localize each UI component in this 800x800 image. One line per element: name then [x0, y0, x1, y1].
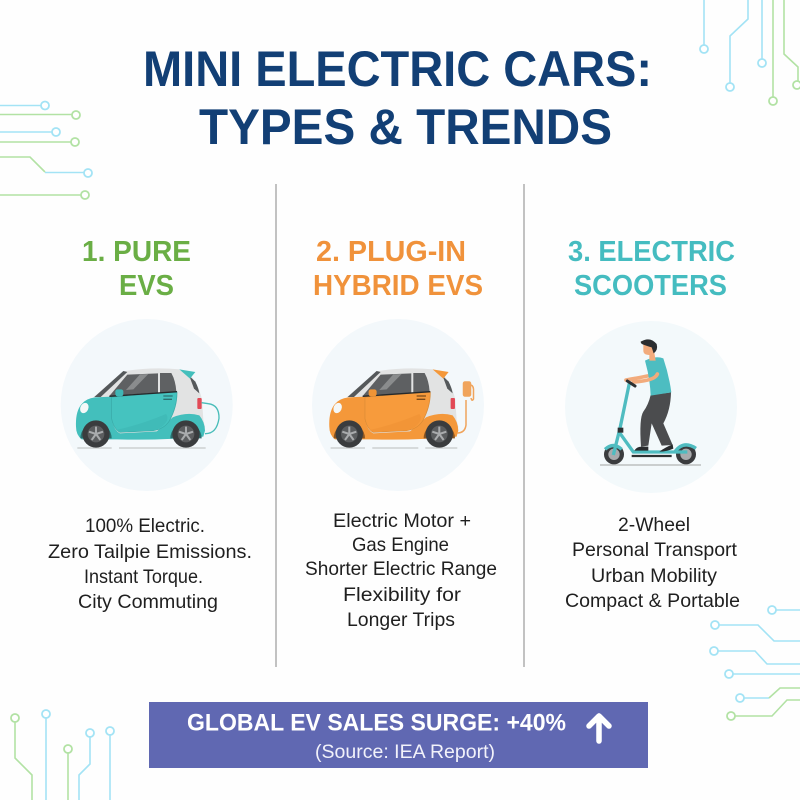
- icon: up arrow: [589, 716, 609, 741]
- text: scooter features: Personal Transport: [572, 539, 738, 561]
- heading: plug-in hybrid EVs: HYBRID EVS: [313, 270, 483, 302]
- circuit decoration: top left: [0, 102, 92, 199]
- text: scooter features: [565, 514, 740, 612]
- heading: electric scooters: SCOOTERS: [574, 270, 727, 302]
- icon: orange plug-in hybrid car: [312, 319, 484, 491]
- text: plug-in hybrid features: Gas Engine: [352, 534, 449, 556]
- title: MINI ELECTRIC CARS:: [143, 41, 652, 97]
- title: [143, 41, 652, 155]
- circuit decoration: bottom left: [11, 710, 114, 800]
- text: pure EV features: City Commuting: [78, 591, 218, 613]
- text: plug-in hybrid features: Shorter Electric Range: [305, 558, 497, 580]
- title: TYPES & TRENDS: [199, 99, 612, 155]
- banner headline: GLOBAL EV SALES SURGE: +40%: [187, 710, 566, 736]
- column dividers: [276, 184, 524, 667]
- heading: pure EVs: 1. PURE: [82, 236, 191, 268]
- banner source: (Source: IEA Report): [315, 742, 495, 763]
- heading: plug-in hybrid EVs: [313, 236, 483, 302]
- heading: plug-in hybrid EVs: 2. PLUG-IN: [316, 236, 466, 268]
- heading: electric scooters: 3. ELECTRIC: [568, 236, 735, 268]
- text: scooter features: 2-Wheel: [618, 514, 690, 536]
- text: scooter features: Urban Mobility: [591, 565, 717, 587]
- text: plug-in hybrid features: Flexibility for: [343, 584, 462, 606]
- text: plug-in hybrid features: Longer Trips: [347, 609, 455, 631]
- heading: electric scooters: [568, 236, 735, 302]
- text: pure EV features: 100% Electric.: [85, 515, 205, 537]
- circuit decoration: bottom right: [710, 606, 800, 720]
- text: scooter features: Compact & Portable: [565, 590, 740, 612]
- callout: global EV sales banner: [149, 702, 648, 768]
- text: plug-in hybrid features: [305, 510, 497, 631]
- text: pure EV features: Instant Torque.: [84, 566, 203, 588]
- icon: teal electric car: [61, 319, 233, 491]
- text: pure EV features: [48, 515, 252, 613]
- text: pure EV features: Zero Tailpie Emissions.: [48, 541, 252, 563]
- text: plug-in hybrid features: Electric Motor +: [333, 510, 471, 532]
- heading: pure EVs: EVS: [119, 270, 174, 302]
- heading: pure EVs: [82, 236, 191, 302]
- icon: person riding electric scooter: [565, 321, 737, 493]
- circuit decoration: top right: [700, 0, 800, 105]
